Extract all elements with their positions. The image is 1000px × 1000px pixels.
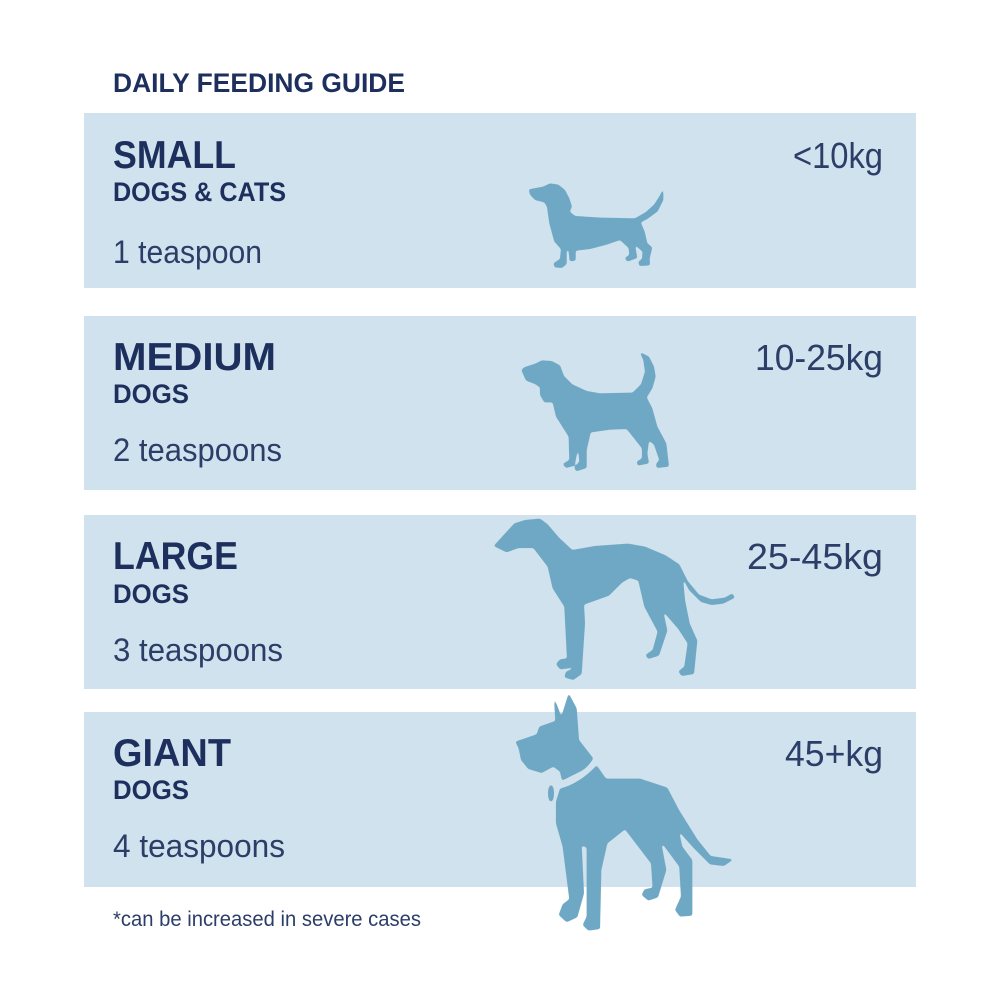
subheading: dogs: DOGS bbox=[113, 579, 189, 609]
weight: 45+kg: 45+kg bbox=[785, 733, 883, 774]
heading: medium: MEDIUM bbox=[113, 336, 276, 379]
subheading: dogs: DOGS bbox=[113, 379, 189, 409]
weight: 10-25kg: 10-25kg bbox=[755, 337, 883, 378]
icon: small dachshund silhouette bbox=[529, 183, 663, 268]
subheading: dogs: DOGS bbox=[113, 775, 189, 805]
panel: giant dogs bbox=[84, 693, 916, 931]
icon: large greyhound silhouette bbox=[494, 519, 735, 680]
heading: large: LARGE bbox=[113, 535, 238, 578]
footnote: *can be increased in severe cases bbox=[113, 908, 421, 931]
subheading: dogs and cats: DOGS & CATS bbox=[113, 177, 286, 207]
panel: large dogs bbox=[84, 515, 916, 689]
title: DAILY FEEDING GUIDE bbox=[113, 68, 405, 98]
icon: medium beagle silhouette bbox=[521, 352, 669, 471]
dose: 1 teaspoon: 1 teaspoon bbox=[113, 234, 262, 270]
dose: 3 teaspoons: 3 teaspoons bbox=[113, 632, 283, 668]
dose: 2 teaspoons: 2 teaspoons bbox=[113, 432, 282, 468]
panel: small dogs and cats bbox=[84, 113, 916, 288]
weight: under 10kg: <10kg bbox=[793, 135, 883, 176]
heading: giant: GIANT bbox=[113, 732, 231, 775]
weight: 25-45kg: 25-45kg bbox=[747, 536, 883, 577]
panel: medium dogs bbox=[84, 316, 916, 490]
heading: small: SMALL bbox=[113, 134, 236, 177]
icon: giant great dane silhouette bbox=[515, 693, 733, 931]
dose: 4 teaspoons: 4 teaspoons bbox=[113, 828, 285, 864]
